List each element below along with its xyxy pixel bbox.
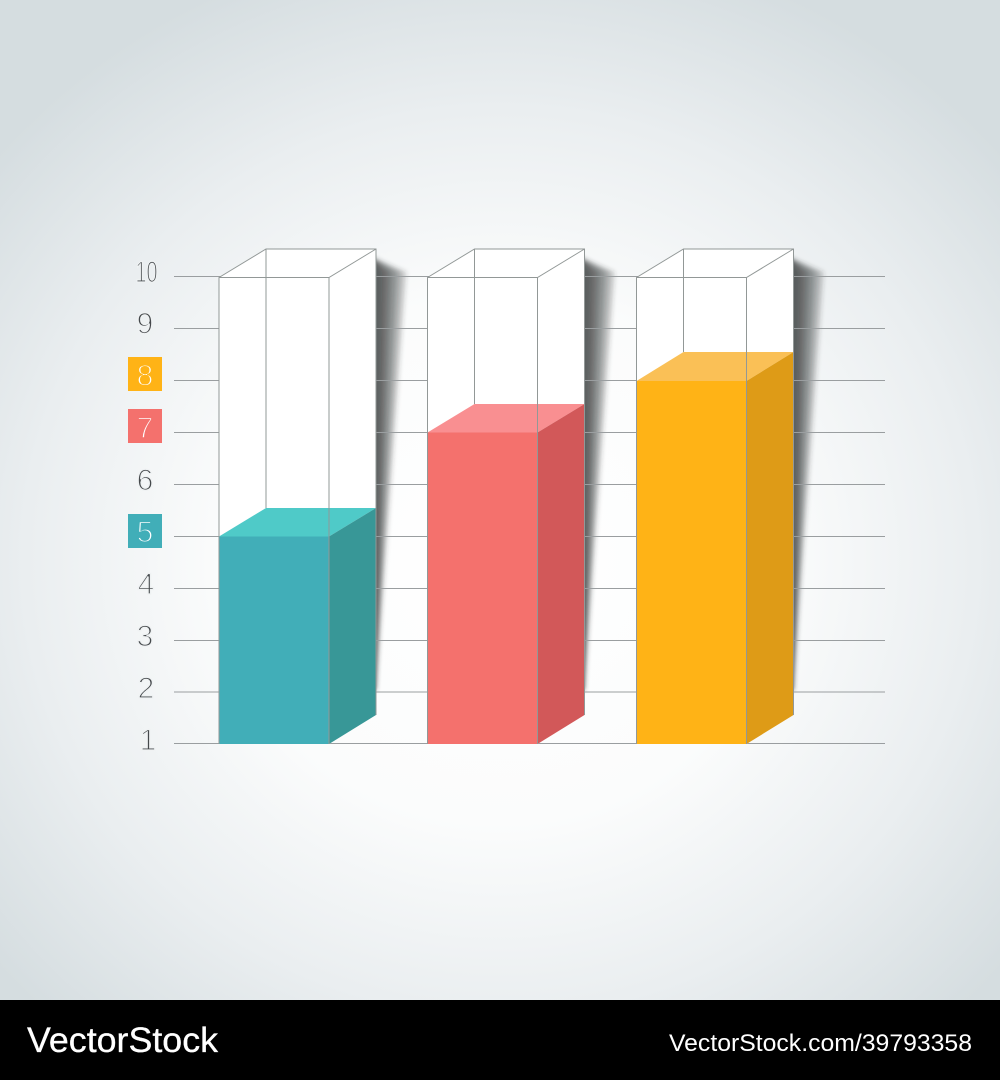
column 1: teal, value 5 [219,249,376,744]
footer bar [0,1000,1000,1080]
label 10: 10 [135,256,158,289]
badge 5 [128,514,162,549]
badge 8 [128,357,162,392]
column shadows [370,256,824,690]
label 9: 9 [137,308,153,340]
footer logo text: VectorStock [27,1021,219,1060]
badge 8: 8 [137,360,153,392]
badge 7 [128,409,162,445]
badge 5: 5 [137,516,153,549]
label 2: 2 [138,672,154,705]
label 1: 1 [140,724,156,757]
column 3: yellow, value 8 [636,249,794,744]
footer url text: VectorStock.com/39793358 [669,1030,972,1057]
label 6: 6 [137,464,153,497]
label 4: 4 [138,568,154,601]
column 2: red, value 7 [428,249,584,744]
badge 7: 7 [137,412,153,445]
gridlines [174,276,885,744]
label 3: 3 [137,620,153,653]
axis labels [128,256,162,757]
